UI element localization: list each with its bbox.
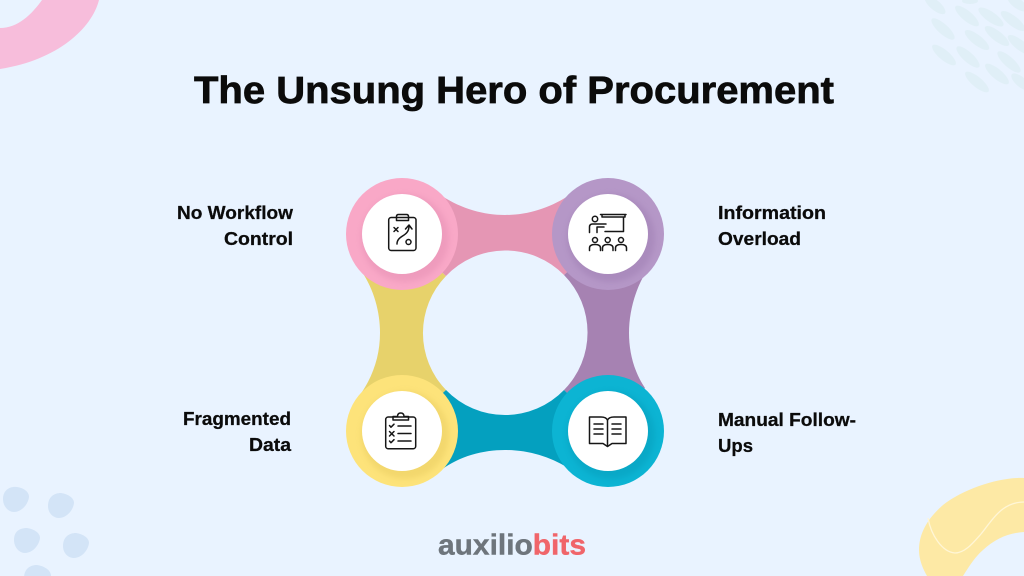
label: Manual Follow-Ups: Ups [718, 436, 753, 456]
decoration: yellow swoosh bottom right [919, 478, 1024, 576]
title: The Unsung Hero of Procurement [194, 70, 834, 112]
decoration: blue blobs bottom left [3, 487, 89, 576]
label: No Workflow Control: No Workflow [177, 203, 294, 223]
label: Fragmented Data: Data [249, 435, 292, 455]
node: teal circle [552, 375, 664, 487]
label: Information Overload: Overload [718, 229, 801, 249]
band: purple right [564, 234, 645, 431]
label: No Workflow Control: Control [224, 229, 293, 249]
label: Manual Follow-Ups: Manual Follow- [718, 410, 856, 430]
label: Fragmented Data [183, 409, 292, 455]
icon: strategy clipboard [389, 214, 416, 250]
icon: presenter and audience [590, 214, 626, 250]
diagram: four connected circles [346, 178, 664, 487]
band: pink top [402, 196, 608, 276]
label: Fragmented Data: Fragmented [183, 409, 291, 429]
band: yellow left [362, 234, 446, 431]
label: Information Overload: Information [718, 203, 826, 223]
logo: auxiliobits: auxiliobits [438, 530, 586, 562]
decoration: pink swoosh top left [0, 0, 99, 69]
band: teal bottom [402, 390, 608, 470]
label: Information Overload [718, 203, 826, 249]
label: No Workflow Control [177, 203, 294, 249]
label: Manual Follow-Ups [718, 410, 856, 456]
node: pink circle [346, 178, 458, 290]
node: purple circle [552, 178, 664, 290]
decoration: teal leaves top right [922, 0, 1024, 95]
icon: checklist clipboard [386, 413, 416, 449]
node: yellow circle [346, 375, 458, 487]
icon: open book [590, 417, 626, 446]
